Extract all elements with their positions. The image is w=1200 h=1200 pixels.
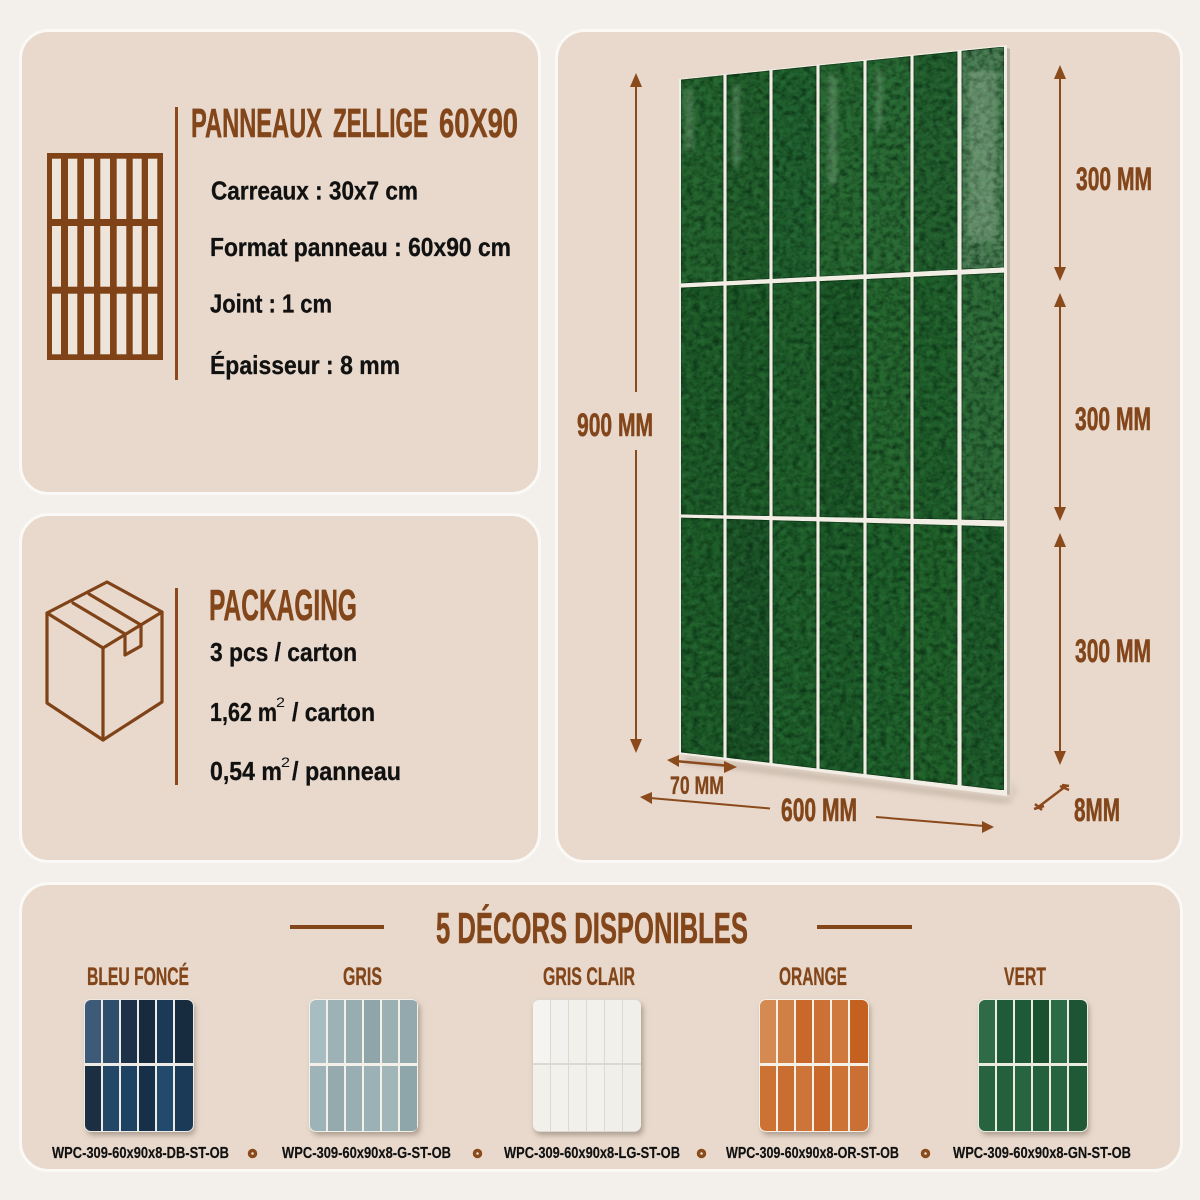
label: 8 mm: 8MM bbox=[1074, 792, 1120, 828]
heading: panneaux zellige: 60X90 bbox=[439, 100, 518, 146]
panel: dimensions photo bbox=[556, 30, 1182, 862]
packaging: area per carton: / carton bbox=[292, 697, 375, 727]
icon: cardboard box bbox=[47, 582, 162, 740]
packaging: area per panel bbox=[210, 754, 401, 786]
panel background: packaging bbox=[20, 514, 540, 862]
swatch: vert bbox=[978, 999, 1089, 1135]
tiles bbox=[681, 47, 1004, 790]
label: 900 mm: 900 MM bbox=[577, 407, 653, 443]
code: gris: WPC-309-60x90x8-G-ST-OB bbox=[282, 1145, 451, 1162]
arrow: 600 mm left bbox=[640, 792, 770, 808]
vertical divider bbox=[175, 107, 178, 380]
packaging: pieces per carton: 3 pcs / carton bbox=[210, 637, 357, 667]
swatch: bleu fonce bbox=[84, 999, 195, 1135]
heading rule right bbox=[817, 925, 912, 929]
heading: panneaux zellige: ZELLIGE bbox=[333, 100, 428, 146]
arrow: 900 mm height bbox=[630, 73, 642, 753]
panel: panneaux zellige specifications bbox=[20, 30, 540, 494]
heading: panneaux zellige bbox=[191, 100, 518, 146]
arrow: middle 300 mm bbox=[1054, 293, 1066, 521]
label: gris clair: GRIS CLAIR bbox=[543, 963, 635, 991]
label: 600 mm: 600 MM bbox=[781, 792, 857, 828]
vertical divider bbox=[175, 588, 178, 785]
panel background: dimensions bbox=[556, 30, 1182, 862]
decor: gris clair bbox=[504, 963, 680, 1162]
separator dot bbox=[474, 1150, 480, 1156]
arrow: 70 mm bbox=[667, 755, 737, 773]
label: bottom 300 mm: 300 MM bbox=[1075, 633, 1151, 669]
heading: panneaux zellige: PANNEAUX bbox=[191, 100, 322, 146]
decor: orange bbox=[726, 963, 899, 1162]
code: vert: WPC-309-60x90x8-GN-ST-OB bbox=[953, 1145, 1131, 1162]
separator dot bbox=[250, 1150, 256, 1156]
packaging: area per carton bbox=[210, 694, 375, 727]
decor: vert bbox=[953, 963, 1131, 1162]
glaze highlights bbox=[685, 70, 996, 240]
decor: bleu fonce bbox=[52, 962, 229, 1162]
arrow: top 300 mm bbox=[1054, 65, 1066, 281]
label: top 300 mm: 300 MM bbox=[1076, 161, 1152, 197]
arrow: bottom 300 mm bbox=[1054, 533, 1066, 765]
label: bleu fonce: BLEU FONCÉ bbox=[87, 962, 189, 991]
heading: 5 decors disponibles: 5 DÉCORS DISPONIBLES bbox=[436, 903, 748, 953]
packaging: area per panel: 0,54 m bbox=[210, 756, 282, 786]
panel background: decors bbox=[20, 884, 1182, 1170]
zellige panel photo bbox=[679, 45, 1016, 803]
code: gris clair: WPC-309-60x90x8-LG-ST-OB bbox=[504, 1145, 680, 1162]
swatch: orange bbox=[759, 999, 870, 1135]
swatch: gris clair bbox=[533, 999, 643, 1135]
panel: packaging bbox=[20, 514, 540, 862]
label: 70 mm: 70 MM bbox=[670, 772, 724, 800]
panel grout backing bbox=[679, 45, 1007, 796]
icon: tile panel grid bbox=[47, 153, 163, 360]
decor: gris bbox=[282, 963, 451, 1162]
arrow: 600 mm right bbox=[876, 817, 994, 833]
packaging: area per carton: 2 bbox=[276, 694, 285, 710]
spec: format panneau: Format panneau : 60x90 cm bbox=[210, 232, 511, 262]
code: bleu fonce: WPC-309-60x90x8-DB-ST-OB bbox=[52, 1145, 229, 1162]
arrow: 8 mm thickness bbox=[1034, 785, 1069, 810]
separator dot bbox=[698, 1150, 704, 1156]
label: vert: VERT bbox=[1004, 963, 1046, 991]
panel side edge bbox=[1004, 47, 1010, 795]
panel: available decors bbox=[20, 884, 1182, 1170]
label: middle 300 mm: 300 MM bbox=[1075, 401, 1151, 437]
spec: joint: Joint : 1 cm bbox=[210, 288, 332, 318]
packaging: area per panel: 2 bbox=[281, 754, 290, 770]
packaging: area per panel: / panneau bbox=[292, 756, 401, 786]
spec: carreaux: Carreaux : 30x7 cm bbox=[211, 176, 418, 206]
code: orange: WPC-309-60x90x8-OR-ST-OB bbox=[726, 1145, 899, 1162]
heading: packaging: PACKAGING bbox=[209, 581, 357, 630]
panel cast shadow bbox=[685, 757, 1016, 803]
panel background: specifications bbox=[20, 30, 540, 494]
label: gris: GRIS bbox=[343, 963, 382, 991]
spec: epaisseur: Épaisseur : 8 mm bbox=[210, 350, 400, 380]
label: orange: ORANGE bbox=[779, 963, 847, 991]
swatch: gris bbox=[309, 999, 420, 1135]
heading rule left bbox=[290, 925, 384, 929]
separator dot bbox=[922, 1150, 928, 1156]
packaging: area per carton: 1,62 m bbox=[210, 697, 277, 727]
